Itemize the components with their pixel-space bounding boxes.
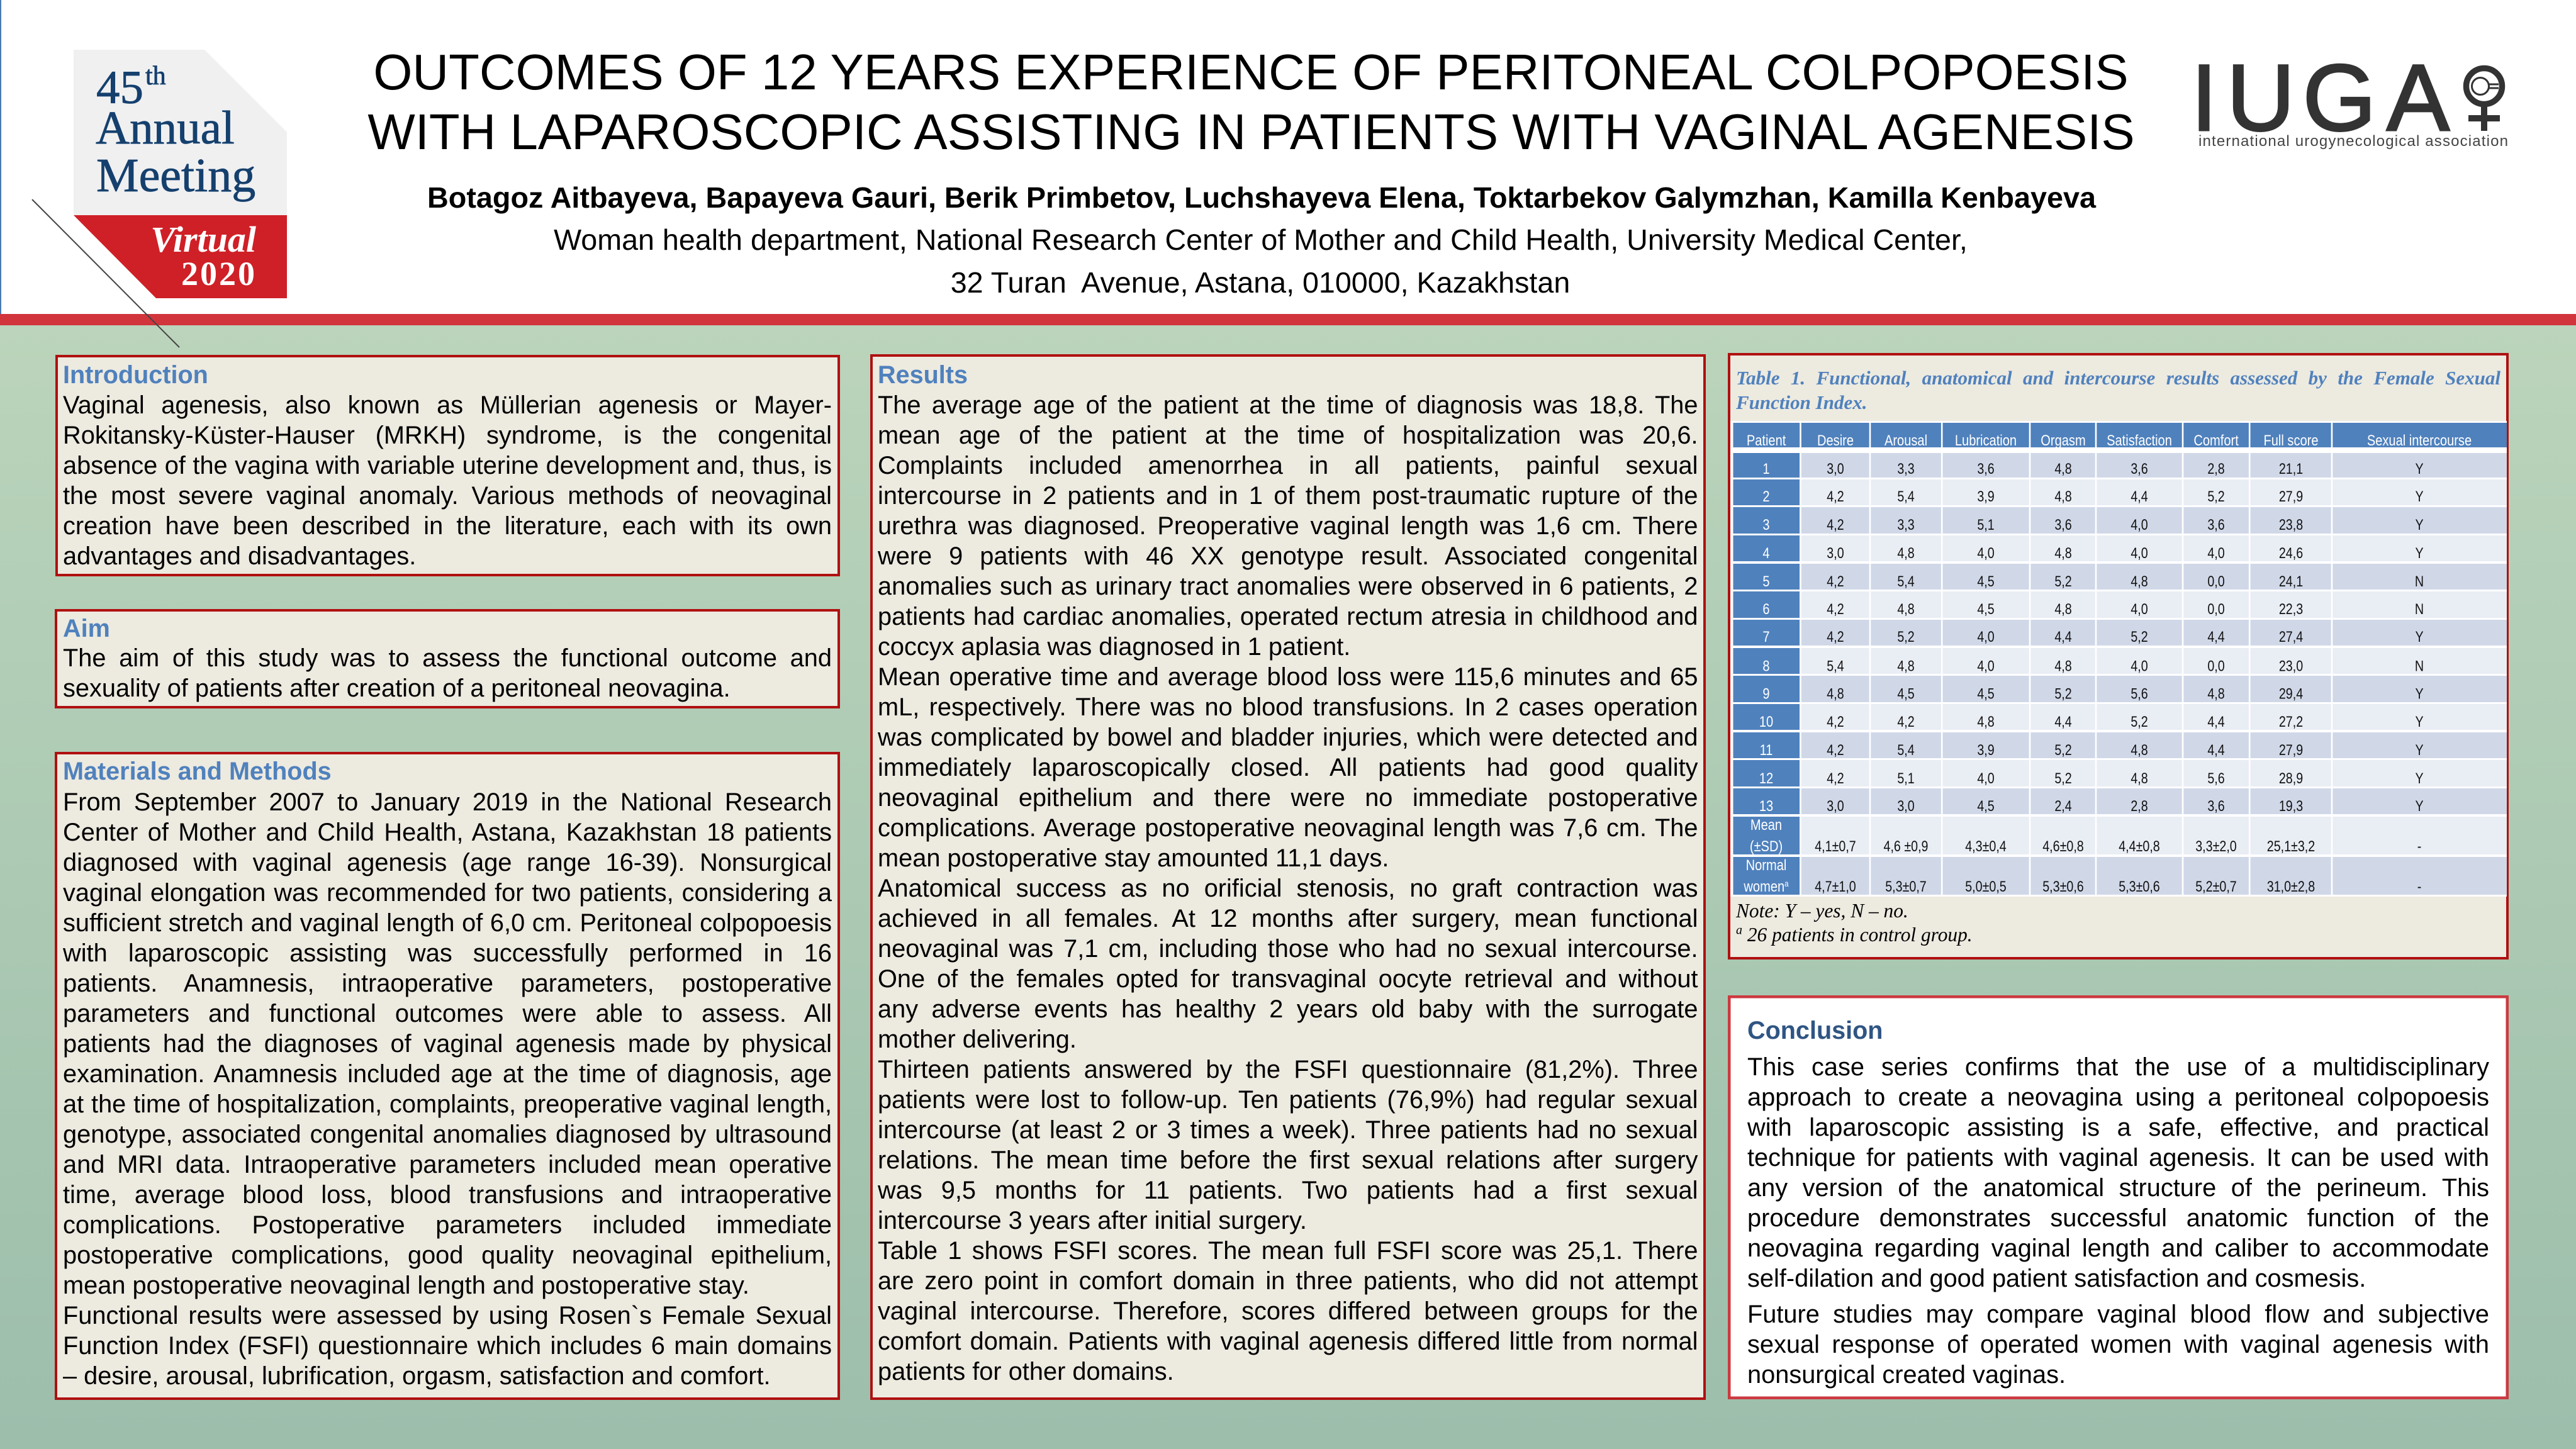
- table header row: Patient: [1747, 432, 1786, 449]
- text: conclusion paragraph 2: nonsurgical created vaginas.: [1747, 1361, 2066, 1389]
- text: conclusion paragraph 1: with laparoscopic assisting is a safe, effective, and practical: [1747, 1114, 2489, 1141]
- row: mean SD: 4,6 ±0,9: [1884, 837, 1928, 854]
- row: patient 4: 4,0: [1977, 544, 1995, 561]
- row: patient 1: [1762, 460, 2424, 477]
- row: patient 11: 4,4: [2207, 741, 2225, 758]
- row: mean SD: 3,3±2,0: [2195, 837, 2237, 854]
- row: patient 5: 5: [1762, 573, 1770, 590]
- row: patient 9: Y: [2415, 685, 2424, 702]
- row: patient 4: 4,0: [2207, 544, 2225, 561]
- row: patient 4: 3,0: [1827, 544, 1844, 561]
- text: results body: mL, respectively. There was no blood transfusions. In 2 cases operation: [878, 693, 1698, 721]
- text: introduction body: Rokitansky-Küster-Hauser (MRKH) syndrome, is the congenital: [63, 422, 832, 449]
- row: patient 2: Y: [2415, 488, 2424, 505]
- row: patient 2: 27,9: [2279, 488, 2303, 505]
- text: methods body: parameters and functional outcomes were able to assess. All: [63, 999, 832, 1027]
- row: patient 7: 7: [1762, 628, 1770, 645]
- logo: 45th Annual Meeting Virtual 2020: 2020: [181, 255, 257, 293]
- text: results body: mean age of the patient at the time of hospitalization was 20,6.: [878, 422, 1698, 449]
- row: patient 12: Y: [2415, 769, 2424, 786]
- table caption: Function Index.: [1736, 391, 1867, 413]
- row: mean SD: -: [2417, 837, 2421, 854]
- row: patient 10: [1759, 713, 2424, 730]
- logo: IUGA: international urogynecological association: [2198, 133, 2508, 150]
- row: patient 7: 5,2: [1897, 628, 1915, 645]
- text: methods body: sufficient stretch and vaginal length of 6,0 cm. Peritoneal colpopoesis: [63, 909, 832, 936]
- row: patient 1: Y: [2415, 460, 2424, 477]
- text: results body: are zero point in comfort domain in three patients, who did not attempt: [878, 1267, 1698, 1295]
- text: aim body: The aim of this study was to assess the functional outcome and: [63, 644, 832, 672]
- row: patient 6: 6: [1762, 600, 1770, 617]
- text: results body: intercourse (at least 2 or 3 times a week). Three patients had no sexual: [878, 1116, 1698, 1144]
- text: conclusion paragraph 1: procedure demonstrates successful anatomic function of the: [1747, 1204, 2489, 1232]
- row: mean SD: (±SD): [1750, 837, 1783, 854]
- table header row: Comfort: [2193, 432, 2239, 449]
- row: patient 3: 3,6: [2207, 516, 2225, 533]
- row: patient 11: Y: [2415, 741, 2424, 758]
- row: patient 13: Y: [2415, 797, 2424, 814]
- row: patient 7: 4,0: [1977, 628, 1995, 645]
- row: patient 5: 5,4: [1897, 573, 1915, 590]
- text: results body: vaginal intercourse. Therefore, scores differed between groups for the: [878, 1297, 1698, 1325]
- logo: IUGA: [2191, 57, 2508, 150]
- text: methods body: patients had the diagnoses of vaginal agenesis made by physical: [63, 1029, 832, 1057]
- text: results body: neovaginal was 7,1 cm, including those who had no sexual intercourse.: [878, 935, 1698, 963]
- text: methods body: examination. Anamnesis included age at the time of diagnosis, age: [63, 1060, 832, 1087]
- table header row: Sexual intercourse: [2367, 432, 2472, 449]
- text: methods body: at the time of hospitalization, complaints, preoperative vaginal length,: [63, 1090, 832, 1117]
- row: patient 3: [1762, 516, 2424, 533]
- row: patient 8: N: [2415, 657, 2424, 674]
- row: normal women: 5,3±0,6: [2042, 878, 2084, 895]
- row: patient 2: 4,4: [2131, 488, 2148, 505]
- affiliation: 32 Turan Avenue, Astana, 010000, Kazakhstan: [951, 266, 1570, 299]
- row: patient 8: 4,0: [2131, 657, 2148, 674]
- text: results body: relations. The mean time before the first sexual relations after surgery: [878, 1146, 1698, 1174]
- row: normal women: a: [1784, 878, 1789, 888]
- text: results body: patients were lost to follow-up. Ten patients (76,9%) had regular sexual: [878, 1086, 1698, 1114]
- row: mean SD: 25,1±3,2: [2267, 837, 2315, 854]
- table header row: Orgasm: [2041, 432, 2086, 449]
- row: patient 8: 23,0: [2279, 657, 2303, 674]
- row: patient 12: [1759, 769, 2424, 786]
- row: patient 8: 4,0: [1977, 657, 1995, 674]
- text: methods body: postoperative complications, good quality neovaginal epithelium,: [63, 1241, 832, 1268]
- text: introduction body: Vaginal agenesis, also known as Müllerian agenesis or Mayer-: [63, 391, 832, 419]
- row: patient 10: 27,2: [2279, 713, 2303, 730]
- panel: materials and methods: [55, 752, 840, 1400]
- row: patient 3: 3: [1762, 516, 1770, 533]
- text: aim body: sexuality of patients after creation of a peritoneal neovagina.: [63, 674, 731, 702]
- text: methods body: vaginal elongation was recommended for two patients, considering a: [63, 878, 832, 906]
- table header row: Arousal: [1884, 432, 1927, 449]
- row: patient 13: 3,6: [2207, 797, 2225, 814]
- panel: introduction: [55, 355, 840, 576]
- row: normal women: 5,0±0,5: [1965, 878, 2007, 895]
- row: patient 2: 5,4: [1897, 488, 1915, 505]
- row: patient 10: 4,2: [1827, 713, 1844, 730]
- table caption: [1736, 367, 2500, 413]
- row: patient 3: Y: [2415, 516, 2424, 533]
- text: conclusion paragraph 1: neovagina regarding vaginal length and caliber to accommodate: [1747, 1234, 2489, 1262]
- row: patient 8: [1762, 657, 2424, 674]
- row: patient 2: 5,2: [2207, 488, 2225, 505]
- row: patient 5: N: [2415, 573, 2424, 590]
- text: results body: was 9,5 months for 11 patients. Two patients had a first sexual: [878, 1177, 1698, 1204]
- text: introduction body: absence of the vagina with variable uterine development and, thus, is: [63, 452, 832, 479]
- table notes: Note: Y – yes, N – no.: [1736, 900, 1908, 922]
- row: mean SD: 4,4±0,8: [2119, 837, 2160, 854]
- text: methods body: diagnosed with vaginal agenesis (age range 16-39). Nonsurgical: [63, 848, 832, 876]
- text: conclusion paragraph 1: any version of the anatomical structure of the perineum. This: [1747, 1174, 2489, 1202]
- row: normal women: 31,0±2,8: [2267, 878, 2315, 895]
- row: patient 11: 4,2: [1827, 741, 1844, 758]
- panel: conclusion: [1728, 995, 2509, 1399]
- text: methods body: – desire, arousal, lubrification, orgasm, satisfaction and comfort.: [63, 1362, 771, 1389]
- row: patient 9: 29,4: [2279, 685, 2303, 702]
- text: results body: Anatomical success as no orificial stenosis, no graft contraction was: [878, 875, 1698, 902]
- row: patient 10: 4,4: [2207, 713, 2225, 730]
- row: patient 7: 4,2: [1827, 628, 1844, 645]
- logo: 45th Annual Meeting Virtual 2020: 45: [96, 62, 143, 114]
- table header row: [1747, 432, 2472, 449]
- text: conclusion paragraph 2: [1747, 1301, 2489, 1389]
- affiliation: Woman health department, National Research Center of Mother and Child Health, University Medical Center,: [554, 223, 1968, 256]
- text: methods body: [63, 788, 832, 1389]
- row: patient 2: 2: [1762, 488, 1770, 505]
- logo: 45th Annual Meeting Virtual 2020: th: [145, 62, 166, 91]
- text: methods body: mean postoperative neovaginal length and postoperative stay.: [63, 1271, 749, 1299]
- text: introduction body: the most severe vaginal anomaly. Various methods of neovaginal: [63, 482, 832, 510]
- text: results body: complications. Average postoperative neovaginal length was 7,6 cm. The: [878, 814, 1698, 842]
- row: patient 3: 5,1: [1977, 516, 1995, 533]
- table header row: Full score: [2263, 432, 2319, 449]
- row: patient 4: 4,8: [2054, 544, 2072, 561]
- data table: [1730, 421, 2507, 897]
- row: patient 5: 24,1: [2279, 573, 2303, 590]
- table caption: Table 1. Functional, anatomical and intercourse results assessed by the Female Sexual: [1736, 367, 2500, 389]
- row: patient 10: 10: [1759, 713, 1773, 730]
- row: patient 12: 5,1: [1897, 769, 1915, 786]
- panel: results: [870, 354, 1706, 1400]
- title: OUTCOMES OF 12 YEARS EXPERIENCE OF PERITONEAL COLPOPOESIS: [373, 44, 2129, 100]
- row: patient 13: 3,0: [1827, 797, 1844, 814]
- text: aim body: [63, 644, 832, 702]
- heading: materials and methods: Materials and Methods: [63, 758, 332, 785]
- row: patient 4: 24,6: [2279, 544, 2303, 561]
- heading: introduction: Introduction: [63, 361, 208, 389]
- table header row: Desire: [1817, 432, 1854, 449]
- text: conclusion paragraph 1: approach to create a neovagina using a peritoneal colpopoesis: [1747, 1083, 2489, 1111]
- row: patient 4: [1762, 544, 2424, 561]
- row: patient 1: 2,8: [2207, 460, 2225, 477]
- text: introduction body: creation have been described in the literature, each with its own: [63, 512, 832, 540]
- row: patient 1: 1: [1762, 460, 1770, 477]
- text: introduction body: advantages and disadvantages.: [63, 542, 416, 570]
- text: conclusion paragraph 1: self-dilation and good patient satisfaction and cosmesis.: [1747, 1265, 2366, 1292]
- row: patient 13: 19,3: [2279, 797, 2303, 814]
- row: patient 5: 4,8: [2131, 573, 2148, 590]
- text: results body: comfort domain. Patients with vaginal agenesis differed little from normal: [878, 1328, 1698, 1355]
- row: normal women: [1744, 856, 2421, 895]
- row: patient 13: 3,0: [1897, 797, 1915, 814]
- row: patient 3: 23,8: [2279, 516, 2303, 533]
- row: patient 7: Y: [2415, 628, 2424, 645]
- row: patient 3: 4,2: [1827, 516, 1844, 533]
- background: [0, 325, 2576, 1449]
- text: methods body: patients. Anamnesis, intraoperative parameters, postoperative: [63, 969, 832, 997]
- row: patient 5: 4,5: [1977, 573, 1995, 590]
- title: WITH LAPAROSCOPIC ASSISTING IN PATIENTS WITH VAGINAL AGENESIS: [367, 104, 2135, 160]
- text: results body: patients for other domains.: [878, 1358, 1174, 1385]
- row: patient 6: 4,5: [1977, 600, 1995, 617]
- text: methods body: Functional results were assessed by using Rosen`s Female Sexual: [63, 1301, 832, 1329]
- row: patient 6: 4,0: [2131, 600, 2148, 617]
- row: patient 1: 3,3: [1897, 460, 1915, 477]
- row: patient 9: [1762, 685, 2424, 702]
- row: patient 5: 4,2: [1827, 573, 1844, 590]
- text: conclusion paragraph 2: Future studies may compare vaginal blood flow and subjective: [1747, 1301, 2489, 1328]
- row: patient 1: 3,0: [1827, 460, 1844, 477]
- text: methods body: and MRI data. Intraoperative parameters included mean operative: [63, 1150, 832, 1178]
- text: results body: mean postoperative stay amounted 11,1 days.: [878, 844, 1389, 872]
- text: results body: neovaginal epithelium and there were no immediate postoperative: [878, 784, 1698, 812]
- row: patient 3: 4,0: [2131, 516, 2148, 533]
- title: [367, 44, 2135, 160]
- row: patient 7: 5,2: [2131, 628, 2148, 645]
- row: normal women: -: [2417, 878, 2421, 895]
- heading: aim: Aim: [63, 615, 110, 642]
- text: conclusion paragraph 2: sexual response of operated women with vaginal agenesis with: [1747, 1331, 2489, 1358]
- authors: Botagoz Aitbayeva, Bapayeva Gauri, Berik Primbetov, Luchshayeva Elena, Toktarbekov Galymzhan, Kamilla Kenbayeva: [427, 181, 2096, 214]
- text: results body: were 9 patients with 46 XX genotype result. Associated congenital: [878, 542, 1698, 570]
- row: patient 1: 4,8: [2054, 460, 2072, 477]
- text: results body: Mean operative time and average blood loss were 115,6 minutes and 65: [878, 663, 1698, 691]
- row: patient 5: [1762, 573, 2424, 590]
- text: conclusion paragraph 1: This case series confirms that the use of a multidisciplinary: [1747, 1053, 2489, 1081]
- text: results body: Thirteen patients answered by the FSFI questionnaire (81,2%). Three: [878, 1056, 1698, 1083]
- row: patient 6: 4,8: [2054, 600, 2072, 617]
- text: methods body: Center of Mother and Child Health, Astana, Kazakhstan 18 patients: [63, 818, 832, 846]
- table notes: [1735, 900, 1973, 946]
- heading: results: Results: [878, 361, 968, 389]
- text: methods body: complications. Postoperative parameters included immediate: [63, 1211, 832, 1238]
- text: results body: immediately laparoscopically closed. All patients had good quality: [878, 754, 1698, 781]
- text: results body: intercourse in 2 patients and in 1 of them post-traumatic rupture of the: [878, 482, 1698, 510]
- row: patient 6: 4,8: [1897, 600, 1915, 617]
- panel: table 1: [1728, 353, 2509, 959]
- row: normal women: 5,3±0,6: [2119, 878, 2160, 895]
- row: patient 3: 3,6: [2054, 516, 2072, 533]
- row: patient 9: 5,6: [2131, 685, 2148, 702]
- text: methods body: time, average blood loss, blood transfusions and intraoperative: [63, 1180, 832, 1208]
- row: patient 10: 4,4: [2054, 713, 2072, 730]
- row: patient 13: [1759, 797, 2424, 814]
- row: patient 4: Y: [2415, 544, 2424, 561]
- row: patient 6: 4,2: [1827, 600, 1844, 617]
- row: patient 4: 4,0: [2131, 544, 2148, 561]
- row: normal women: women: [1744, 878, 1784, 895]
- text: methods body: Function Index (FSFI) questionnaire which includes 6 main domains: [63, 1331, 832, 1359]
- row: patient 6: 0,0: [2207, 600, 2225, 617]
- row: patient 6: N: [2415, 600, 2424, 617]
- row: patient 8: 4,8: [1897, 657, 1915, 674]
- text: conclusion paragraph 1: technique for patients with vaginal agenesis. It can be used with: [1747, 1144, 2489, 1172]
- row: patient 9: 9: [1762, 685, 1770, 702]
- row: normal women: 5,3±0,7: [1885, 878, 1927, 895]
- text: methods body: with laparoscopic assisting was successfully performed in 16: [63, 939, 832, 966]
- row: patient 13: 2,8: [2131, 797, 2148, 814]
- row: patient 12: 4,0: [1977, 769, 1995, 786]
- row: patient 7: [1762, 628, 2424, 645]
- text: methods body: From September 2007 to January 2019 in the National Research: [63, 788, 832, 815]
- row: patient 1: 21,1: [2279, 460, 2303, 477]
- text: conclusion paragraph 1: [1747, 1053, 2489, 1292]
- row: patient 2: 3,9: [1977, 488, 1995, 505]
- row: patient 6: 22,3: [2279, 600, 2303, 617]
- logo: 45th Annual Meeting Virtual 2020: [31, 50, 287, 348]
- row: mean SD: Mean: [1750, 816, 1782, 833]
- row: patient 6: [1762, 600, 2424, 617]
- text: results body: patients had cardiac anomalies, operated rectum atresia in childhood and: [878, 603, 1698, 630]
- text: results body: anomalies such as urinary tract anomalies were observed in 6 patients, 2: [878, 573, 1698, 600]
- row: patient 13: 2,4: [2054, 797, 2072, 814]
- row: patient 10: 4,8: [1977, 713, 1995, 730]
- row: patient 12: 28,9: [2279, 769, 2303, 786]
- row: patient 11: 5,2: [2054, 741, 2072, 758]
- row: patient 12: 5,6: [2207, 769, 2225, 786]
- row: patient 7: 4,4: [2054, 628, 2072, 645]
- row: patient 7: 27,4: [2279, 628, 2303, 645]
- text: results body: any adverse events has healthy 2 years old baby with the surrogate: [878, 995, 1698, 1023]
- row: normal women: 4,7±1,0: [1815, 878, 1856, 895]
- row: patient 11: 11: [1760, 741, 1772, 758]
- row: patient 9: 5,2: [2054, 685, 2072, 702]
- row: patient 8: 5,4: [1827, 657, 1844, 674]
- row: patient 8: 0,0: [2207, 657, 2225, 674]
- row: normal women: 5,2±0,7: [2195, 878, 2237, 895]
- row: patient 11: [1760, 741, 2424, 758]
- text: results body: was complicated by bowel and bladder injuries, which were detected and: [878, 724, 1698, 751]
- row: patient 5: 0,0: [2207, 573, 2225, 590]
- row: patient 1: 3,6: [2131, 460, 2148, 477]
- row: patient 12: 5,2: [2054, 769, 2072, 786]
- text: results body: mother delivering.: [878, 1026, 1077, 1053]
- text: results body: intercourse 3 years after initial surgery.: [878, 1207, 1307, 1234]
- heading: conclusion: Conclusion: [1747, 1017, 1883, 1044]
- text: results body: Table 1 shows FSFI scores. The mean full FSFI score was 25,1. There: [878, 1237, 1698, 1265]
- row: patient 12: 12: [1759, 769, 1773, 786]
- row: patient 2: [1762, 488, 2424, 505]
- text: methods body: genotype, associated congenital anomalies diagnosed by ultrasound: [63, 1120, 832, 1148]
- row: patient 9: 4,5: [1977, 685, 1995, 702]
- text: results body: The average age of the patient at the time of diagnosis was 18,8. The: [878, 391, 1698, 419]
- row: normal women: Normal: [1746, 856, 1786, 873]
- text: results body: One of the females opted for transvaginal oocyte retrieval and without: [878, 965, 1698, 993]
- row: patient 13: 4,5: [1977, 797, 1995, 814]
- row: patient 4: 4,8: [1897, 544, 1915, 561]
- affiliation: [554, 223, 1968, 299]
- text: results body: Complaints included amenorrhea in all patients, painful sexual: [878, 452, 1698, 479]
- header red band: [0, 314, 2576, 325]
- row: mean SD: 4,1±0,7: [1815, 837, 1856, 854]
- row: mean SD: 4,3±0,4: [1965, 837, 2007, 854]
- row: patient 9: 4,8: [2207, 685, 2225, 702]
- row: patient 8: 4,8: [2054, 657, 2072, 674]
- row: patient 3: 3,3: [1897, 516, 1915, 533]
- logo: 45th Annual Meeting Virtual 2020: Meeting: [96, 149, 255, 202]
- row: patient 8: 8: [1762, 657, 1770, 674]
- text: results body: achieved in all females. At 12 months after surgery, mean functional: [878, 905, 1698, 932]
- row: patient 11: 5,4: [1897, 741, 1915, 758]
- table header row: Lubrication: [1955, 432, 2017, 449]
- row: patient 12: 4,8: [2131, 769, 2148, 786]
- row: patient 7: 4,4: [2207, 628, 2225, 645]
- row: patient 11: 27,9: [2279, 741, 2303, 758]
- row: mean SD: 4,6±0,8: [2042, 837, 2084, 854]
- row: patient 5: 5,2: [2054, 573, 2072, 590]
- row: patient 2: 4,2: [1827, 488, 1844, 505]
- row: patient 2: 4,8: [2054, 488, 2072, 505]
- row: patient 10: 4,2: [1897, 713, 1915, 730]
- row: patient 4: 4: [1762, 544, 1770, 561]
- row: patient 11: 4,8: [2131, 741, 2148, 758]
- logo: 45th Annual Meeting Virtual 2020: Annual: [96, 102, 235, 154]
- row: patient 9: 4,5: [1897, 685, 1915, 702]
- table header row: Satisfaction: [2107, 432, 2172, 449]
- row: patient 1: 3,6: [1977, 460, 1995, 477]
- text: results body: [878, 391, 1698, 1385]
- text: introduction body: [63, 391, 832, 570]
- row: patient 11: 3,9: [1977, 741, 1995, 758]
- row: patient 9: 4,8: [1827, 685, 1844, 702]
- logo: 45th Annual Meeting Virtual 2020: Virtual: [150, 219, 257, 260]
- row: mean SD: [1750, 816, 2421, 854]
- text: results body: urethra was diagnosed. Preoperative vaginal length was 1,6 cm. There: [878, 512, 1698, 540]
- row: patient 10: 5,2: [2131, 713, 2148, 730]
- row: patient 10: Y: [2415, 713, 2424, 730]
- row: patient 13: 13: [1759, 797, 1773, 814]
- panel: aim: [55, 609, 840, 708]
- row: patient 12: 4,2: [1827, 769, 1844, 786]
- text: results body: coccyx aplasia was diagnosed in 1 patient.: [878, 633, 1350, 661]
- table notes: a 26 patients in control group.: [1736, 924, 1973, 946]
